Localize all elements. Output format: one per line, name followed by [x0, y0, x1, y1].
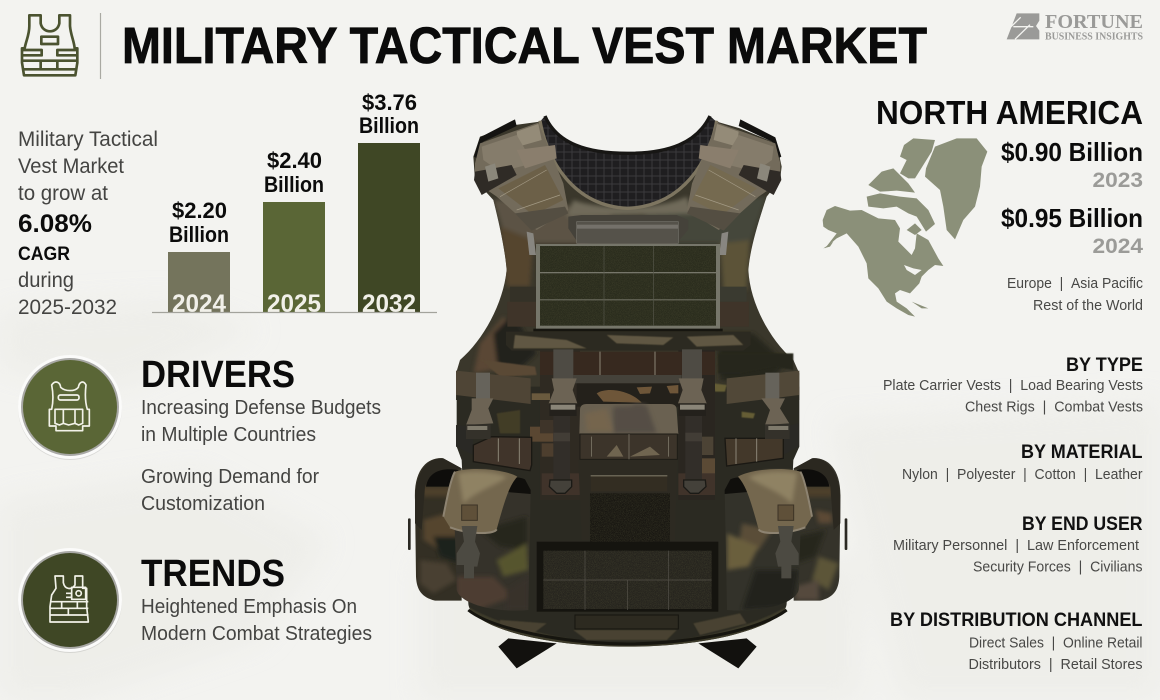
left front pocket	[443, 469, 531, 611]
region values: $0.90 Billion	[1001, 137, 1143, 167]
drivers text: in Multiple Countries	[141, 424, 316, 446]
segment: by type: BY TYPE	[1066, 355, 1143, 376]
header divider	[100, 13, 102, 79]
CAGR text block: during	[18, 269, 74, 292]
lower body	[457, 387, 799, 647]
vest illustration	[408, 116, 847, 668]
bar 2025: $2.40	[267, 148, 322, 173]
region values: 2024	[1092, 235, 1143, 258]
vest upper: neck, shoulders and chest panel	[456, 116, 799, 400]
segment: by material	[902, 442, 1143, 483]
map: North America	[823, 138, 987, 317]
vest lower: pockets and pouches	[408, 404, 847, 629]
drivers heading: DRIVERS	[141, 354, 295, 396]
right front pocket	[725, 469, 812, 611]
segment: by distribution channel: Direct Sales | Online Retail	[969, 634, 1142, 652]
bar chart	[152, 90, 437, 318]
bottom straps	[498, 638, 557, 668]
drivers text	[141, 397, 381, 515]
left outer pocket	[408, 458, 462, 601]
CAGR text block: to grow at	[18, 182, 108, 205]
trends heading: TRENDS	[141, 553, 285, 595]
right vertical strap and buckle	[678, 349, 707, 493]
bar 2025: Billion	[264, 172, 324, 197]
segment: by distribution channel	[890, 610, 1143, 673]
segment: by type	[883, 355, 1143, 416]
bar 2024: $2.20	[172, 198, 227, 223]
CAGR text block: 2025-2032	[18, 296, 117, 319]
top plate	[568, 215, 688, 243]
brackets beside panel	[527, 232, 536, 255]
vest midsection: webbing, belts and buckles	[456, 349, 799, 500]
region heading: NORTH AMERICA	[876, 95, 1143, 132]
CAGR text block: 6.08%	[18, 210, 92, 238]
inner collar mesh	[538, 116, 718, 210]
other regions: Europe | Asia Pacific	[1007, 275, 1143, 292]
left shoulder straps	[474, 119, 568, 231]
segment: by material: Nylon | Polyester | Cotton | Leather	[902, 466, 1142, 483]
segment: by end user: Security Forces | Civilians	[973, 558, 1142, 576]
bottom admin pouch	[537, 542, 718, 629]
drivers text: Growing Demand for	[141, 466, 319, 488]
CAGR text block: CAGR	[18, 244, 70, 265]
neck trim	[540, 121, 717, 208]
drivers text: Customization	[141, 493, 265, 515]
other regions	[1007, 275, 1143, 314]
trends text: Modern Combat Strategies	[141, 623, 372, 645]
vest lower body: hem and bottom straps	[457, 387, 799, 668]
segment: by end user: BY END USER	[1022, 514, 1143, 535]
side webbing	[507, 302, 749, 327]
right shoulder straps	[687, 119, 781, 231]
region values	[1001, 137, 1143, 258]
brick webbing columns	[530, 350, 715, 500]
body silhouette	[456, 122, 799, 400]
trends text: Heightened Emphasis On	[141, 596, 357, 618]
bar 2032: Billion	[359, 113, 419, 138]
bar 2024: 2024	[172, 290, 226, 318]
CAGR text block	[18, 128, 158, 319]
left side belt	[456, 371, 532, 471]
segment: by type: Chest Rigs | Combat Vests	[965, 398, 1143, 416]
bar 2025	[263, 148, 325, 318]
mid camo base	[463, 350, 793, 500]
region values: 2023	[1092, 169, 1143, 192]
centre webbing band	[540, 352, 715, 407]
segment: by material: BY MATERIAL	[1021, 442, 1143, 463]
segment: by distribution channel: Distributors | Retail Stores	[968, 656, 1142, 673]
CAGR text block: Military Tactical	[18, 128, 158, 151]
left vertical strap and buckle	[549, 349, 577, 493]
region values: $0.95 Billion	[1001, 203, 1143, 233]
bar 2024: Billion	[169, 222, 229, 247]
icon: vest with pouches	[49, 382, 89, 431]
segment: by end user: Military Personnel | Law Enforcement	[893, 537, 1140, 554]
central pouch	[578, 404, 678, 542]
drivers text: Increasing Defense Budgets	[141, 397, 381, 419]
trends text	[141, 596, 372, 645]
bar 2025: 2025	[267, 290, 321, 318]
right outer pocket	[794, 458, 847, 601]
icon: vest with radio pouch	[50, 576, 88, 622]
CAGR text block: Vest Market	[18, 155, 124, 178]
segment: by distribution channel: BY DISTRIBUTION CHANNEL	[890, 610, 1143, 631]
other regions: Rest of the World	[1033, 297, 1143, 314]
velcro panel	[533, 244, 723, 331]
bar 2032: 2032	[362, 290, 416, 318]
logo: Fortune Business Insights	[1007, 11, 1143, 42]
bar 2032: $3.76	[362, 90, 417, 115]
segment: by end user	[893, 514, 1143, 576]
drivers badge	[18, 355, 122, 460]
segment: by type: Plate Carrier Vests | Load Bearing Vests	[883, 377, 1143, 394]
logo: Fortune Business Insights: BUSINESS INSIGHTS	[1045, 32, 1143, 42]
lower camo band	[506, 332, 751, 351]
right side belt	[725, 371, 799, 466]
title: MILITARY TACTICAL VEST MARKET	[122, 17, 927, 74]
logo: Fortune Business Insights: FORTUNE	[1045, 11, 1143, 33]
trends badge	[18, 548, 122, 653]
bar 2032	[358, 90, 420, 318]
bar 2024	[168, 198, 230, 318]
header icon: tactical vest outline	[22, 15, 77, 75]
